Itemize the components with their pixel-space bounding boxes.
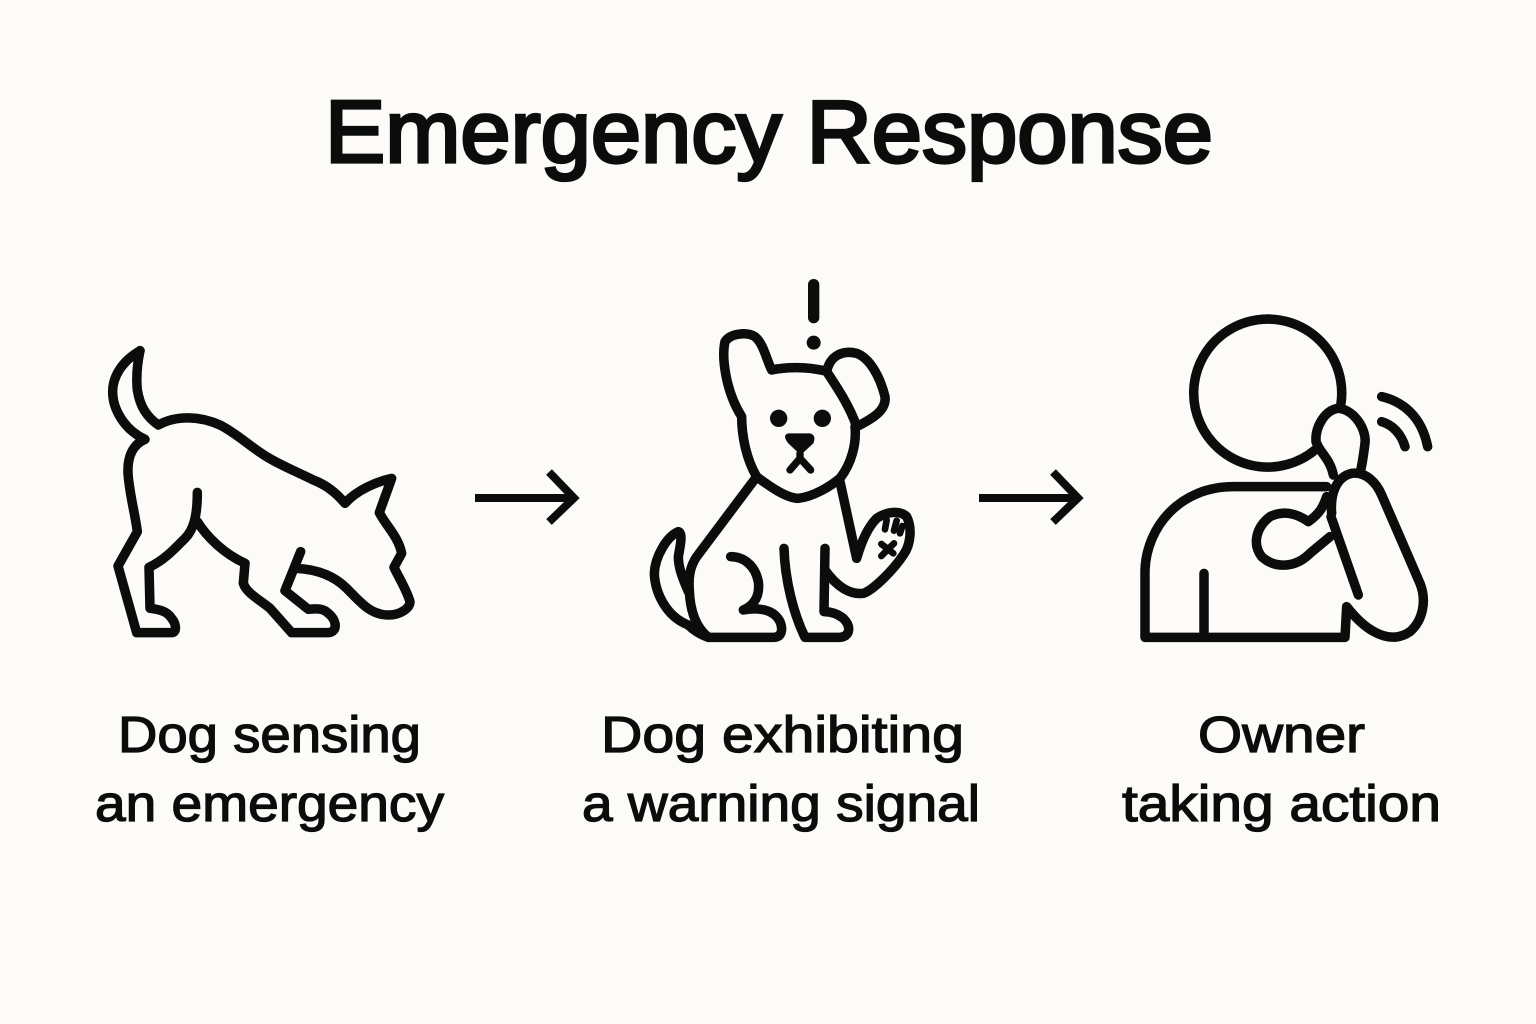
dog head and ears bbox=[724, 334, 885, 498]
exclamation mark bbox=[807, 285, 821, 350]
arrow: step one to step two bbox=[475, 472, 574, 522]
arm inner line bbox=[1331, 517, 1358, 595]
icon: dog sniffing bbox=[113, 351, 410, 633]
label: dog sensing: an emergency bbox=[95, 775, 445, 832]
phone bbox=[1316, 408, 1365, 475]
label: dog sensing: Dog sensing bbox=[118, 706, 421, 763]
label: dog exhibiting: a warning signal bbox=[582, 775, 980, 832]
icon: dog giving warning bbox=[654, 285, 910, 637]
raised paw details bbox=[881, 520, 902, 556]
head bbox=[1194, 319, 1342, 467]
dog body and legs bbox=[654, 477, 910, 637]
torso and arm bbox=[1145, 473, 1423, 637]
title: Emergency Response bbox=[325, 82, 1213, 181]
sound waves bbox=[1382, 397, 1428, 447]
hand bbox=[1256, 497, 1330, 565]
torso crease bbox=[1190, 573, 1218, 635]
dog face bbox=[770, 410, 831, 470]
icon: owner on phone bbox=[1145, 319, 1428, 637]
label: owner: Owner bbox=[1198, 706, 1365, 763]
label: dog exhibiting: Dog exhibiting bbox=[601, 706, 964, 763]
arrow: step two to step three bbox=[979, 472, 1078, 522]
label: owner: taking action bbox=[1122, 775, 1441, 832]
